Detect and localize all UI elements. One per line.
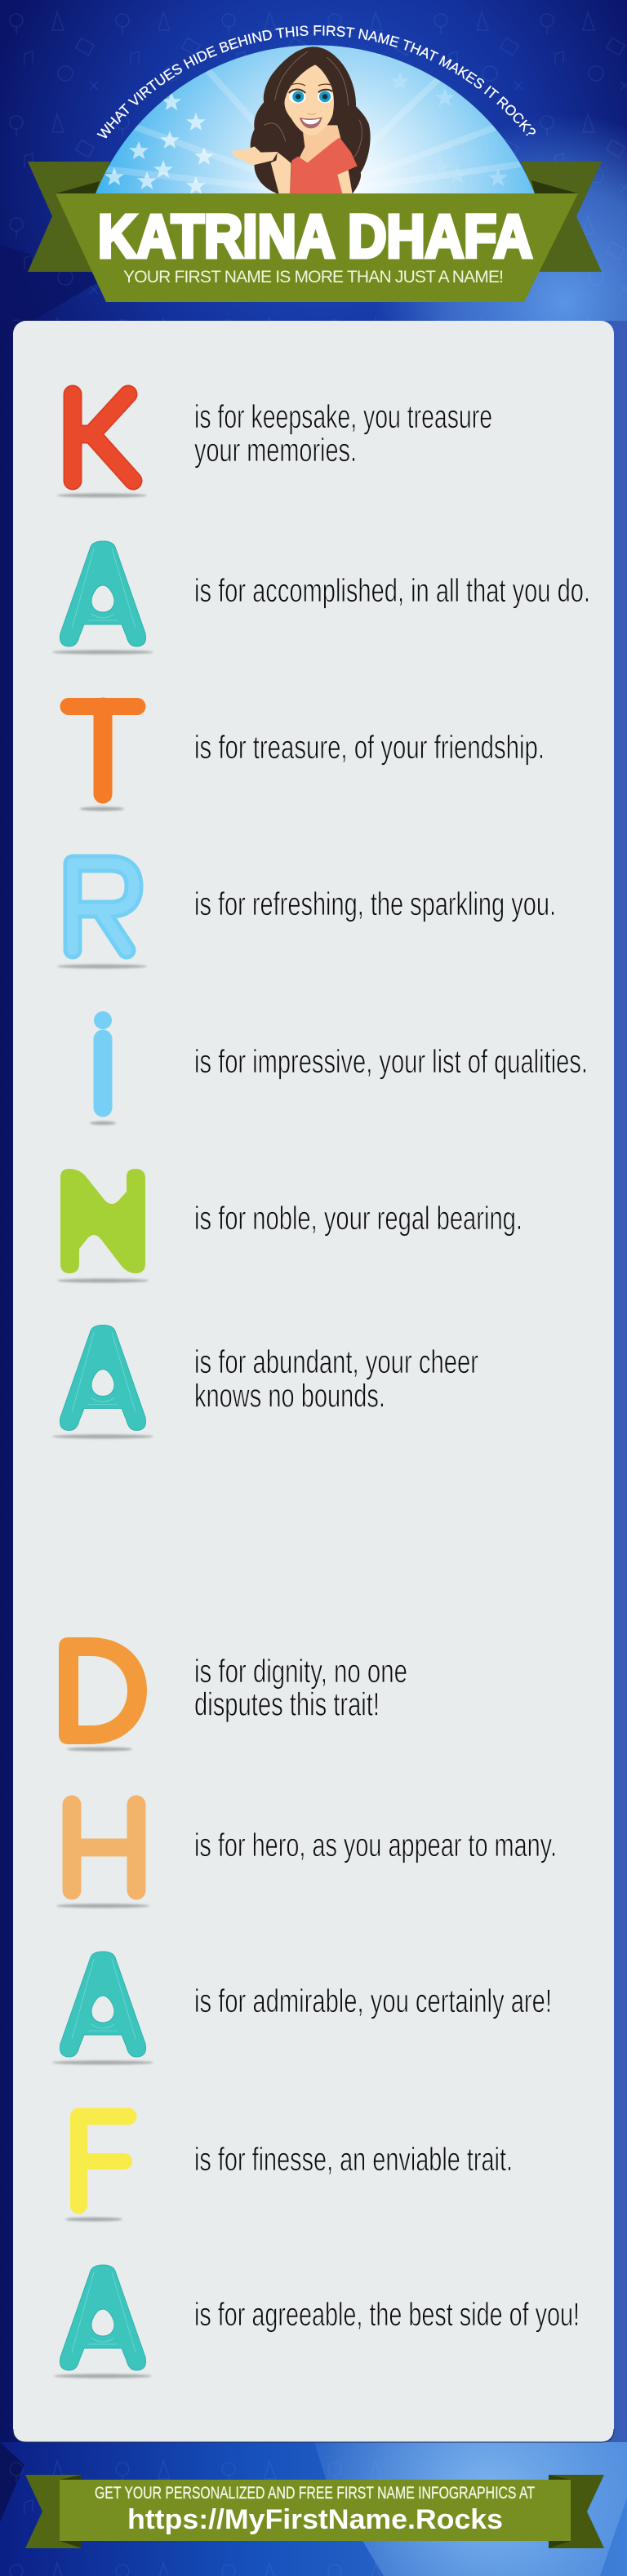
panel: letters card	[13, 321, 614, 2442]
header: dome with stars	[90, 39, 555, 194]
row: A accomplished	[52, 541, 590, 655]
row: D: is for dignity, no one	[194, 1654, 407, 1690]
ribbon tails	[28, 162, 110, 272]
footer url: https://MyFirstName.Rocks	[127, 2504, 503, 2535]
row: F: is for finesse, an enviable trait.	[194, 2142, 513, 2178]
footer tails	[25, 2475, 82, 2548]
red shirt	[290, 137, 358, 193]
title ribbon	[28, 162, 602, 302]
eyes	[289, 91, 306, 104]
row: F	[65, 2116, 513, 2222]
text: is for keepsake, you treasure	[194, 399, 492, 435]
footer ribbon	[25, 2475, 604, 2548]
row: i	[90, 1011, 588, 1125]
row: N	[57, 1169, 522, 1283]
subtitle: YOUR FIRST NAME IS MORE THAN JUST A NAME!	[123, 268, 504, 286]
row: R	[57, 864, 556, 968]
mouth	[300, 117, 322, 128]
row: A abundant	[52, 1326, 478, 1438]
title: KATRINA DHAFA	[98, 202, 532, 270]
row: D: disputes this trait!	[194, 1686, 380, 1722]
row: D	[59, 1637, 407, 1752]
letter K	[73, 394, 133, 481]
row: A abundant: knows no bounds.	[194, 1378, 385, 1414]
row: A admirable	[52, 1952, 552, 2065]
icon: cartoon woman	[231, 47, 371, 193]
row: K	[57, 394, 492, 498]
neck	[298, 125, 341, 165]
row: A agreeable	[54, 2265, 580, 2378]
arms and hand	[231, 146, 291, 193]
ribbon front	[56, 193, 578, 302]
text: your memories.	[194, 433, 357, 469]
text	[194, 399, 492, 469]
row: A abundant: is for abundant, your cheer	[194, 1344, 478, 1380]
ribbon folds	[56, 181, 100, 193]
arched tagline: WHAT VIRTUES HIDE BEHIND THIS FIRST NAME THAT MAKES IT ROCK?	[96, 25, 536, 139]
footer front	[60, 2480, 571, 2541]
footer folds	[60, 2475, 82, 2480]
face	[284, 64, 334, 135]
row: T	[69, 707, 545, 811]
hair	[251, 47, 371, 193]
row: H	[56, 1805, 557, 1908]
